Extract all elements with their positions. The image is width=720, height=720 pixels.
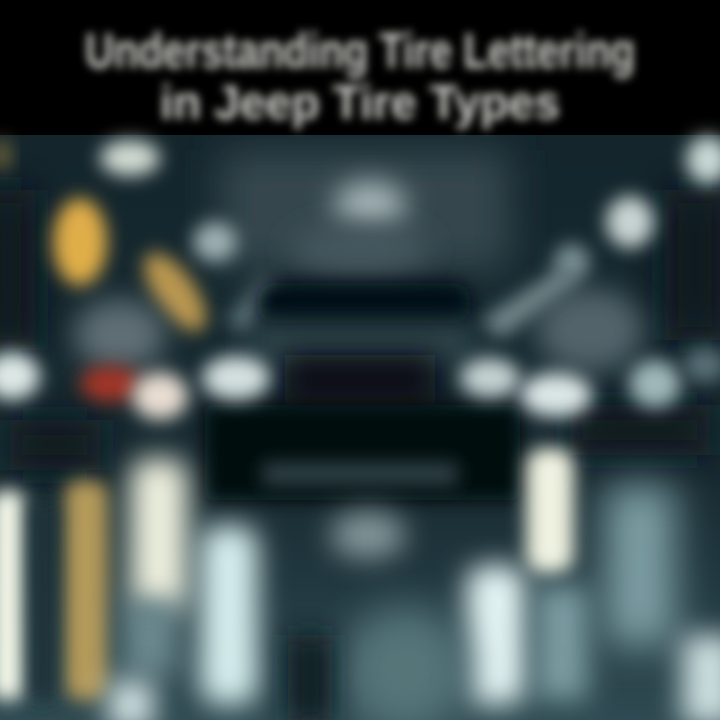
black title band [0, 0, 720, 135]
title: in Jeep Tire Types [160, 77, 560, 130]
vehicle body [74, 224, 644, 500]
wet road reflections [0, 448, 720, 720]
headlights and red light [0, 347, 720, 420]
centre road details [288, 511, 469, 720]
upper lights and gold accents [0, 136, 720, 341]
title [85, 23, 635, 130]
